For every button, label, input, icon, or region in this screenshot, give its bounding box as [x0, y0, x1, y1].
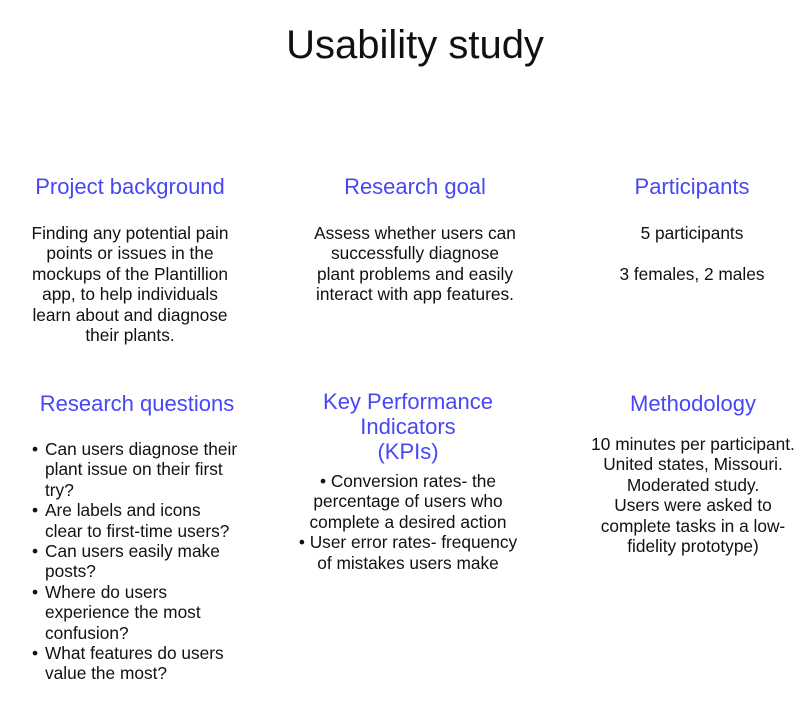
text: KPIs body: percentage of users who	[313, 491, 503, 511]
text: methodology body: Users were asked to	[614, 495, 772, 515]
panel: methodology	[591, 391, 795, 556]
list: research questions: confusion?	[45, 623, 129, 643]
text: research goal body: successfully diagnose	[331, 243, 499, 263]
list: research questions: posts?	[45, 561, 96, 581]
text: methodology body: fidelity prototype)	[627, 536, 759, 556]
text: participants body: 3 females, 2 males	[619, 264, 765, 284]
text: research goal body: Assess whether users can	[314, 223, 516, 243]
text: KPIs body: complete a desired action	[310, 512, 506, 532]
list: research questions: value the most?	[45, 663, 167, 683]
text: research goal body	[314, 223, 516, 304]
heading: methodology: Methodology	[630, 391, 756, 416]
text: project background body: learn about and diagnose	[32, 305, 228, 325]
text: KPIs body	[299, 471, 518, 573]
text: methodology body: United states, Missouri.	[603, 454, 783, 474]
heading: KPIs: Key Performance	[323, 389, 493, 414]
heading: KPIs: (KPIs)	[377, 439, 439, 464]
heading: KPIs	[323, 389, 493, 464]
text: KPIs body: • Conversion rates- the	[320, 471, 496, 491]
text: KPIs body: • User error rates- frequency	[299, 532, 517, 552]
text: project background body: points or issues in the	[46, 243, 214, 263]
panel: KPIs	[299, 389, 518, 573]
list: research questions: try?	[45, 480, 74, 500]
panel: research questions	[32, 391, 237, 683]
text: project background body: app, to help individuals	[42, 284, 218, 304]
text: project background body: Finding any potential pain	[32, 223, 228, 243]
text: participants body: 5 participants	[641, 223, 743, 243]
text: research goal body: interact with app features.	[316, 284, 514, 304]
list: research questions: clear to first-time users?	[45, 521, 229, 541]
list: research questions: Can users diagnose their	[45, 439, 237, 459]
text: methodology body: complete tasks in a low-	[601, 516, 785, 536]
text: methodology body: 10 minutes per participant.	[591, 434, 795, 454]
heading: research goal: Research goal	[344, 174, 486, 199]
text: project background body: their plants.	[85, 325, 175, 345]
panel: participants	[619, 174, 765, 284]
heading: participants: Participants	[635, 174, 749, 199]
panel: research goal	[314, 174, 516, 304]
text: methodology body	[591, 434, 795, 556]
heading: KPIs: Indicators	[360, 414, 456, 439]
heading: research questions: Research questions	[40, 391, 234, 416]
list: research questions: Can users easily make	[45, 541, 220, 561]
list: research questions: Are labels and icons	[45, 500, 201, 520]
text: project background body: mockups of the Plantillion	[32, 264, 228, 284]
list: research questions	[32, 439, 237, 683]
list: research questions: What features do users	[45, 643, 224, 663]
list: research questions: Where do users	[45, 582, 167, 602]
panel: project background	[32, 174, 228, 345]
heading: project background: Project background	[35, 174, 225, 199]
text: KPIs body: of mistakes users make	[317, 553, 499, 573]
text: participants body	[619, 223, 765, 284]
text: research goal body: plant problems and easily	[317, 264, 513, 284]
title: Usability study	[286, 23, 544, 67]
list: research questions: experience the most	[45, 602, 201, 622]
text: project background body	[32, 223, 228, 345]
list: research questions: plant issue on their first	[45, 459, 223, 479]
text: methodology body: Moderated study.	[627, 475, 759, 495]
